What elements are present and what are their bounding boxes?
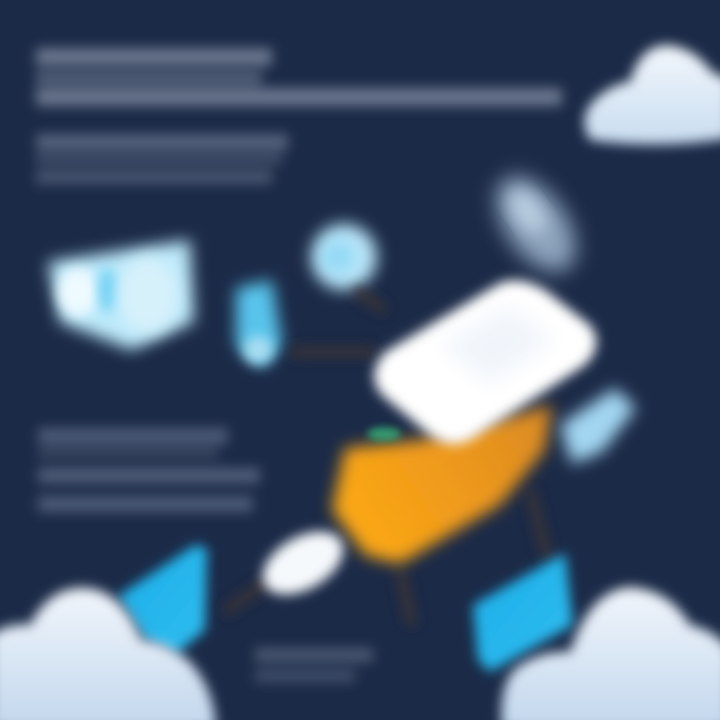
- connector lines: [225, 290, 548, 625]
- cloud: bottom left: [0, 588, 216, 720]
- orange box: [332, 405, 552, 564]
- cloud: top right: [584, 45, 720, 145]
- heading text block: [36, 48, 562, 106]
- white lid: [374, 280, 596, 444]
- icon: tilted top tile: [480, 163, 592, 285]
- cloud: bottom right: [501, 587, 720, 720]
- caption text: [255, 648, 373, 682]
- icon: blue tile right: [473, 553, 573, 672]
- intro text block: [36, 134, 288, 184]
- icon: blue tile left: [118, 545, 207, 655]
- icon: small tile right: [560, 388, 636, 464]
- white capsule: [252, 518, 354, 608]
- icon: small vertical card: [236, 280, 282, 368]
- icon: round orb: [311, 224, 377, 290]
- icon: window panel left: [48, 240, 194, 350]
- lower text block: [38, 428, 260, 512]
